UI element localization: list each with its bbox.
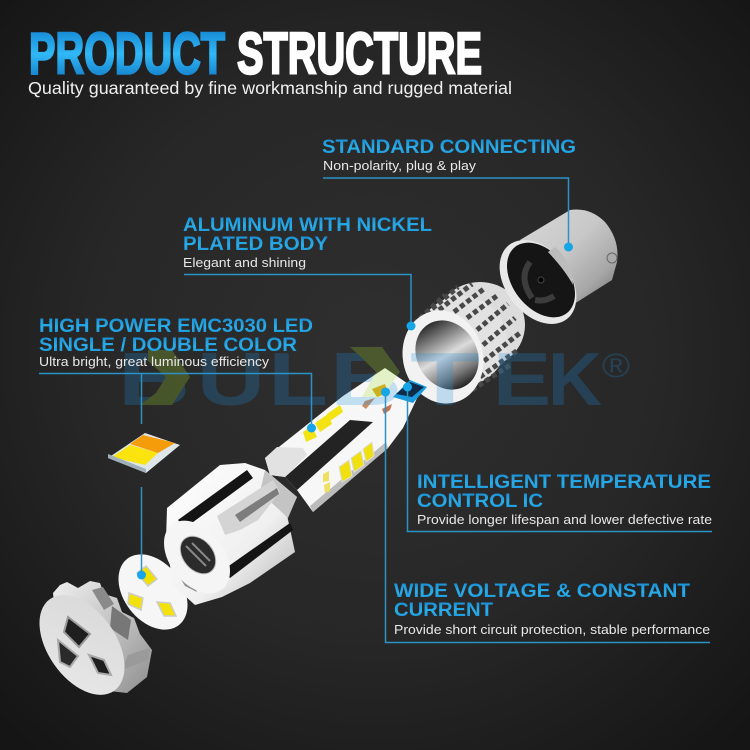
callout: high power LED <box>39 315 316 580</box>
watermark: L <box>268 337 328 421</box>
callout: standard connecting <box>322 136 576 252</box>
callout: high power LED: HIGH POWER EMC3030 LED <box>39 315 313 337</box>
callout: wide voltage: Provide short circuit protection, stable performance <box>394 622 710 637</box>
callout: temperature IC: INTELLIGENT TEMPERATURE <box>417 471 711 493</box>
part: LED disc <box>104 541 202 643</box>
callout: aluminum body: Elegant and shining <box>183 255 306 270</box>
callout: high power LED: SINGLE / DOUBLE COLOR <box>39 334 297 356</box>
part: housing <box>150 463 297 606</box>
callout: high power LED: Ultra bright, great luminous efficiency <box>39 354 270 369</box>
callout: aluminum body: ALUMINUM WITH NICKEL <box>183 214 432 236</box>
watermark <box>118 337 630 421</box>
callout: aluminum body: PLATED BODY <box>183 233 328 255</box>
callout: wide voltage: CURRENT <box>394 599 493 621</box>
callout: wide voltage <box>381 388 710 642</box>
callout: standard connecting: Non-polarity, plug & play <box>323 158 477 173</box>
watermark: K <box>548 337 602 421</box>
watermark: E <box>493 337 551 421</box>
callout: temperature IC <box>403 382 712 532</box>
callout: temperature IC: CONTROL IC <box>417 490 543 512</box>
title: STRUCTURE <box>237 22 482 86</box>
watermark: ® <box>602 347 630 385</box>
watermark: B <box>118 337 190 421</box>
callout: temperature IC: Provide longer lifespan and lower defective rate <box>417 512 712 527</box>
part: bayonet socket <box>484 210 618 339</box>
part: heatsink <box>392 282 525 413</box>
title: PRODUCT <box>29 22 225 86</box>
subtitle: Quality guaranteed by fine workmanship and rugged material <box>28 78 512 98</box>
callout: wide voltage: WIDE VOLTAGE & CONSTANT <box>394 580 690 602</box>
part: end cap <box>22 580 152 710</box>
watermark: B <box>330 337 402 421</box>
part: LED circuit board <box>265 368 427 512</box>
callout: aluminum body <box>183 214 432 330</box>
IC chip <box>393 380 427 403</box>
callout: standard connecting: STANDARD CONNECTING <box>322 136 576 158</box>
title <box>29 22 482 86</box>
watermark: T <box>410 337 480 421</box>
big LED chip <box>108 433 180 473</box>
watermark: U <box>197 337 265 421</box>
